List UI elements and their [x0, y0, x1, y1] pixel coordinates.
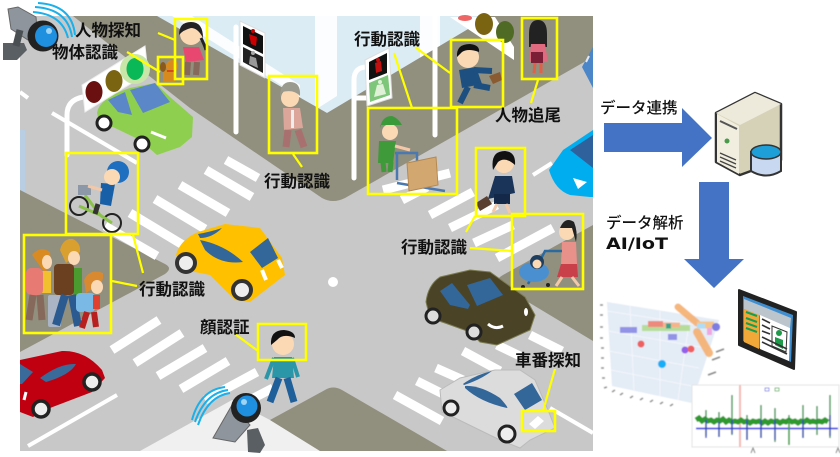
person: cyclist: [70, 161, 129, 232]
pedestrian signal right: [365, 48, 392, 106]
blue car right: [549, 130, 593, 197]
person: elderly woman: [280, 82, 304, 147]
labels on scene: 行動認識: [354, 30, 420, 49]
chart: 3D scatter plot: [594, 297, 724, 407]
yellow car: [176, 224, 285, 302]
white car: [440, 370, 555, 448]
icon: document window: [739, 290, 796, 369]
chart: signal time series: [692, 385, 840, 453]
label: data link: データ連携: [600, 98, 678, 117]
labels on scene: 物体認識: [52, 43, 118, 62]
person: woman from behind: [529, 20, 548, 73]
label: AI/IoT: AI/IoT: [606, 234, 668, 253]
person: delivery worker: [378, 116, 445, 191]
labels on scene: 行動認識: [139, 280, 206, 299]
red car: [20, 351, 105, 417]
pedestrian signal left: [240, 21, 265, 78]
traffic light left: [67, 46, 150, 155]
signal poles: [236, 16, 435, 178]
labels on scene: 行動認識: [401, 238, 468, 257]
person: mother with stroller: [519, 220, 579, 289]
leader lines: [112, 33, 555, 411]
people: family: [26, 239, 103, 328]
sidewalk left: [20, 190, 169, 352]
dark car: [426, 270, 535, 345]
detection boxes: [24, 18, 583, 431]
person: girl: [179, 22, 206, 75]
labels on scene: 人物探知: [75, 21, 141, 40]
arrow: data analysis: [684, 182, 744, 288]
sidewalk right: [498, 225, 593, 341]
road surface: [20, 16, 593, 451]
left edge strip: [20, 130, 25, 227]
street scene panel: [20, 13, 593, 451]
icon: server with database: [716, 93, 781, 176]
labels on scene: 車番探知: [515, 351, 581, 370]
traffic light right: [450, 13, 514, 60]
person: student: [476, 151, 515, 213]
icon: camera top left: [3, 3, 75, 60]
icon: camera bottom: [192, 387, 265, 453]
labels on scene: 行動認識: [264, 172, 330, 191]
building area: [157, 16, 490, 113]
crosswalk markings: [105, 160, 562, 421]
person: running businessman: [457, 44, 502, 103]
corner pavement bottom: [140, 400, 320, 451]
labels on scene: 顔認証: [200, 318, 250, 337]
blue car top right: [582, 47, 593, 88]
sidewalk top: [73, 16, 593, 201]
scatter points: [620, 307, 720, 368]
labels on scene: 人物追尾: [495, 106, 561, 125]
animal: dog: [160, 60, 178, 82]
sidewalk bottom: [270, 388, 447, 451]
labels on scene: [52, 21, 581, 370]
green car: [97, 83, 193, 155]
lane lines: [20, 92, 593, 446]
label: data analysis: データ解析: [606, 213, 684, 232]
arrow: data link: [604, 108, 712, 167]
person: man walking: [266, 330, 298, 402]
